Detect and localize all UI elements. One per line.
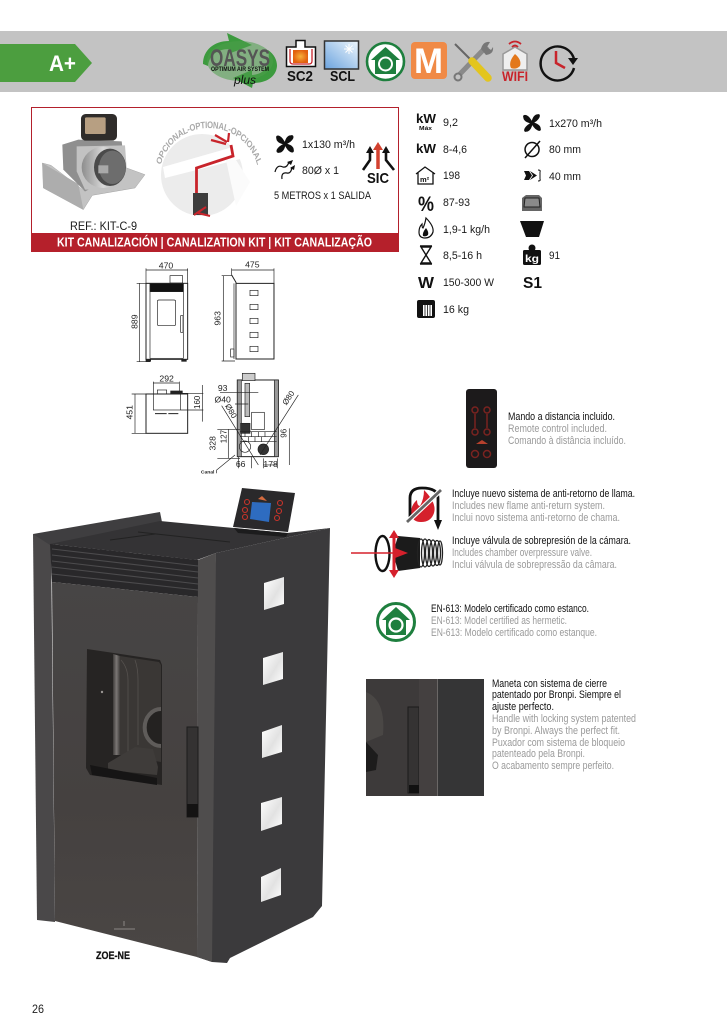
icon: weight [523, 244, 541, 265]
text: remote control: Comando à distância incluído. [508, 435, 626, 447]
rear elevation: 328 [208, 436, 218, 451]
icon: fan small [277, 136, 293, 152]
text: handle: by Bronpi. Always the perfect fit. [492, 725, 620, 737]
text: hermetic certification [431, 603, 597, 639]
kit title bar [31, 233, 399, 252]
text: remote control: Remote control included. [508, 423, 607, 435]
text: flame anti-return: Incluye nuevo sistema de anti-retorno de llama. [452, 488, 635, 500]
icon: SC2 [286, 40, 316, 85]
max power: 9,2 [443, 117, 458, 129]
icon: SIC [363, 142, 394, 187]
text: handle: Handle with locking system patented [492, 713, 636, 725]
air intake diameter: 40 mm [549, 171, 581, 183]
text: handle [492, 678, 636, 772]
stove logo [114, 921, 135, 929]
icon: diameter [525, 141, 540, 158]
optional duct illustration: OPCIONAL-OPTIONAL-OPCIONAL [156, 121, 261, 165]
hopper capacity: 16 kg [443, 304, 469, 316]
text: overpressure valve: Incluye válvula de sobrepresión de la cámara. [452, 535, 631, 547]
icon: flame anti-return [407, 488, 442, 530]
icon: SIC: SIC [367, 170, 389, 187]
text: remote control [508, 411, 626, 447]
rear elevation: Ø40 [214, 394, 231, 404]
text: flame anti-return: Inclui novo sistema anti-retorno de chama. [452, 512, 620, 524]
rear elevation: 127 [220, 429, 229, 443]
text: flame anti-return [452, 488, 635, 524]
icon: house m2 [416, 167, 435, 184]
icon: kW max: Máx [419, 126, 433, 132]
product photo: stove [33, 488, 330, 963]
icon: M badge: M [414, 42, 443, 81]
icon: air intake [524, 170, 540, 181]
stove door [52, 582, 198, 957]
plan view: 451 [124, 405, 134, 420]
rear elevation: Ø80 [223, 402, 239, 420]
control panel [233, 488, 295, 537]
stove window [86, 649, 162, 785]
electric power: 150-300 W [443, 277, 495, 289]
stove side panel [197, 528, 330, 963]
icon: SCL [324, 41, 358, 85]
panel: canalization kit [31, 107, 399, 252]
stove left top rim [33, 512, 162, 545]
text: handle: patentado por Bronpi. Siempre el [492, 689, 621, 701]
front elevation [129, 260, 188, 362]
page number: 26 [32, 1002, 44, 1016]
icon: SC2: SC2 [287, 68, 313, 85]
rear elevation: 93 [218, 383, 228, 393]
rear elevation: 96 [280, 428, 289, 438]
product name: ZOE-NE [96, 950, 130, 962]
icon: hourglass [420, 246, 432, 264]
icon: kW: kW [416, 141, 437, 156]
side windows [261, 577, 284, 902]
rear elevation: Canal [201, 470, 215, 476]
stove front corner strip [197, 553, 216, 962]
icon: overpressure valve [351, 530, 442, 578]
text: hermetic certification: EN-613: Modelo certificado como estanco. [431, 603, 589, 615]
side elevation [213, 260, 274, 361]
energy class badge [0, 44, 92, 82]
icon: tray [522, 195, 542, 211]
kit length: 5 METROS x 1 SALIDA [274, 190, 372, 202]
text: overpressure valve [452, 535, 631, 571]
text: handle: ajuste perfecto. [492, 701, 554, 713]
stove left strip [33, 534, 55, 922]
icon: trapezoid [520, 221, 544, 237]
stove handle [187, 727, 198, 817]
icon: OASYS plus: OPTIMUM AIR SYSTEM [211, 67, 269, 73]
icon: fan [524, 115, 540, 131]
consumption: 1,9-1 kg/h [443, 224, 490, 236]
air flow: 1x270 m³/h [549, 118, 602, 130]
icon: SCL: SCL [330, 68, 355, 85]
plan view [124, 374, 203, 433]
energy class badge: A+ [49, 51, 76, 76]
text: handle: patenteado pela Bronpi. [492, 748, 585, 760]
icon: percent: % [418, 193, 434, 216]
plan view: 160 [193, 395, 202, 409]
rear elevation: 178 [263, 459, 278, 469]
text: handle: Puxador com sistema de bloqueio [492, 737, 625, 749]
kit airflow: 1x130 m³/h [302, 139, 355, 151]
optional duct illustration [156, 121, 261, 217]
icon: wifi: WIFI [502, 68, 528, 84]
icon: wifi [502, 42, 528, 84]
icon: duct arrows [275, 160, 295, 179]
icon: clock [541, 46, 578, 81]
technical drawings [124, 260, 298, 476]
front elevation: 889 [129, 314, 139, 329]
plan view: 292 [159, 374, 174, 384]
icon: hopper [417, 300, 435, 318]
icon: OASYS plus [203, 33, 277, 88]
handle detail photo [366, 679, 484, 796]
kit title bar: KIT CANALIZACIÓN | CANALIZATION KIT | KIT CANALIZAÇÃO [57, 234, 372, 250]
stove grille [50, 544, 198, 597]
side elevation: 475 [245, 260, 260, 270]
icon: OASYS plus: OASYS [210, 45, 270, 72]
icon: W: W [418, 275, 435, 292]
text: handle: Maneta con sistema de cierre [492, 678, 607, 690]
flue diameter: 80 mm [549, 144, 581, 156]
text: overpressure valve: Includes chamber overpressure valve. [452, 547, 592, 559]
text: remote control: Mando a distancia incluido. [508, 411, 615, 423]
icon: kW max [416, 111, 437, 132]
icon: hermetic certification [378, 604, 414, 640]
rear elevation: Ø80 [281, 389, 297, 407]
icon: weight: kg [525, 254, 539, 265]
stove top [50, 521, 330, 560]
front elevation: 470 [159, 260, 173, 270]
icon: tools [454, 42, 493, 80]
icon: hermetic house [367, 43, 404, 80]
heated area: 198 [443, 170, 460, 182]
side elevation: 963 [213, 311, 223, 326]
panel: specifications [416, 111, 602, 318]
text: handle: O acabamento sempre perfeito. [492, 760, 614, 772]
top band [0, 31, 727, 92]
fan motor photo [42, 114, 145, 210]
icon: flame [419, 218, 433, 238]
efficiency: 87-93 [443, 197, 470, 209]
text: flame anti-return: Includes new flame anti-return system. [452, 500, 605, 512]
icon: kW max: kW [416, 111, 437, 126]
weight: 91 [549, 250, 560, 262]
rear elevation [201, 373, 298, 476]
kit diameter: 80Ø x 1 [302, 165, 339, 177]
text: overpressure valve: Inclui válvula de sobrepressão da câmara. [452, 559, 617, 571]
icon: S1: S1 [523, 275, 542, 292]
text: hermetic certification: EN-613: Modelo certificado como estanque. [431, 627, 597, 639]
remote control image [466, 389, 497, 468]
icon: OASYS plus: plus [233, 73, 256, 87]
text: hermetic certification: EN-613: Model certified as hermetic. [431, 615, 567, 627]
power range: 8-4,6 [443, 144, 467, 156]
rear elevation: 66 [236, 459, 246, 469]
icon: house m2: m² [420, 175, 430, 184]
autonomy: 8,5-16 h [443, 250, 482, 262]
kit reference: REF.: KIT-C-9 [70, 219, 137, 233]
